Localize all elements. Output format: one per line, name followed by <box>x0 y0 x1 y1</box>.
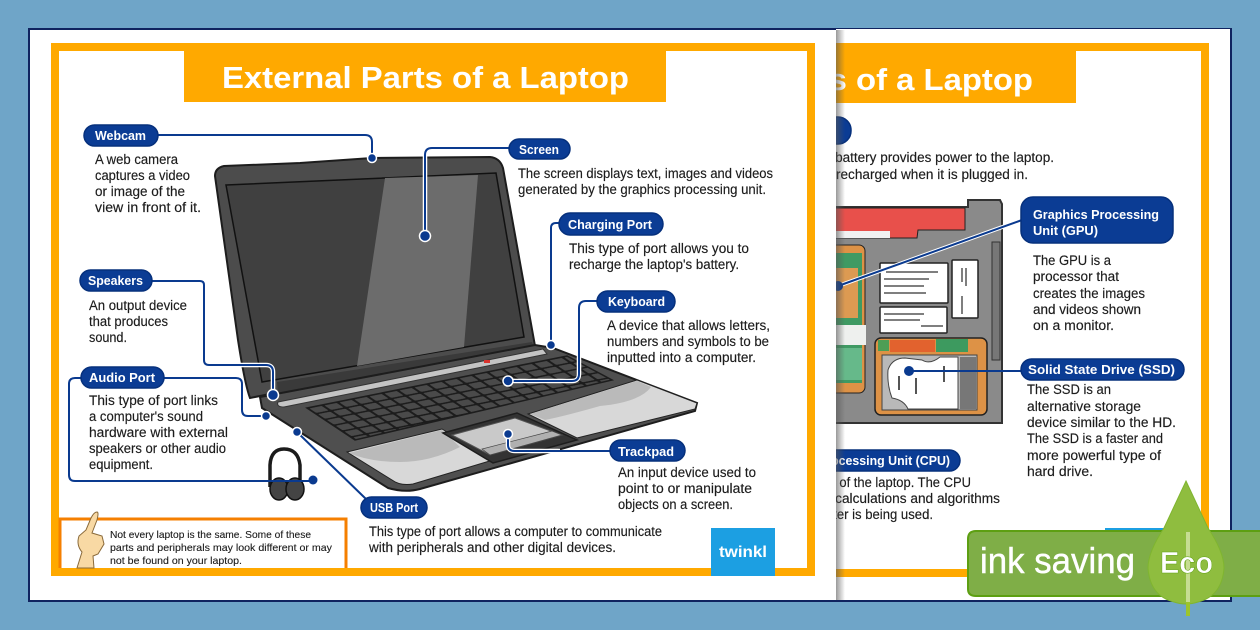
audio port label: Audio Port <box>89 370 156 385</box>
USB port text: This type of port allows a computer to communicate <box>369 524 662 539</box>
audio port text: equipment. <box>89 457 153 472</box>
trackpad <box>443 413 577 463</box>
ink saving text: ink saving <box>980 540 1135 581</box>
connector: audio port <box>162 378 270 420</box>
SSD text: more powerful type of <box>1027 448 1161 463</box>
trackpad label <box>610 440 685 461</box>
keyboard <box>307 356 612 440</box>
panel: back poster, internal parts of a laptop <box>836 28 1232 602</box>
trackpad text: point to or manipulate <box>618 481 752 496</box>
CPU label <box>760 450 960 471</box>
USB port label: USB Port <box>370 500 419 515</box>
charging port text: recharge the laptop's battery. <box>569 257 739 272</box>
SSD text: The SSD is a faster and <box>1027 431 1163 446</box>
keyboard text <box>607 318 770 365</box>
logo: twinkl <box>711 528 775 576</box>
callout: note: not be found on your laptop. <box>110 555 242 567</box>
back title: External Parts of a Laptop <box>626 62 1033 97</box>
Eco text: Eco <box>1160 545 1213 580</box>
laptop lid <box>215 157 535 398</box>
screen label: Screen <box>519 142 559 157</box>
callout: note: parts and peripherals may look different or may <box>110 542 333 554</box>
SSD text: device similar to the HD. <box>1027 415 1176 430</box>
CPU label: Central Processing Unit (CPU) <box>772 453 950 468</box>
trackpad text: objects on a screen. <box>618 497 733 512</box>
connector: keyboard <box>503 301 598 386</box>
CPU text: The brain of the laptop. The CPU <box>781 475 971 490</box>
palm rest <box>347 380 697 484</box>
screen text <box>518 166 773 197</box>
connector: charging port <box>546 223 560 350</box>
battery label and text: It is recharged when it is plugged in. <box>811 167 1028 182</box>
back title <box>590 50 1076 103</box>
audio port text <box>89 393 228 472</box>
webcam text: A web camera <box>95 152 178 167</box>
SSD label <box>1021 359 1184 380</box>
webcam text <box>95 152 201 215</box>
keyboard text: inputted into a computer. <box>607 350 756 365</box>
icon: pointing hand <box>77 512 104 568</box>
keyboard label <box>597 291 675 312</box>
badge: ink saving Eco <box>968 481 1260 616</box>
keyboard text: numbers and symbols to be <box>607 334 769 349</box>
connector: trackpad <box>504 430 611 451</box>
charging port label: Charging Port <box>568 217 653 232</box>
battery label and text: The battery provides power to the laptop. <box>808 150 1054 165</box>
panel: front poster, external parts of a laptop <box>28 28 836 602</box>
speakers text <box>89 298 187 345</box>
trackpad text: An input device used to <box>618 465 756 480</box>
CPU text: when the computer is being used. <box>736 507 933 522</box>
speakers text: sound. <box>89 330 127 345</box>
audio port text: hardware with external <box>89 425 228 440</box>
icon: headphones <box>270 449 304 500</box>
battery label and text <box>780 117 1054 182</box>
audio port text: a computer's sound <box>89 409 203 424</box>
laptop underside illustration <box>836 199 1003 424</box>
webcam text: view in front of it. <box>95 200 201 215</box>
speakers text: that produces <box>89 314 168 329</box>
webcam text: captures a video <box>95 168 190 183</box>
logo: twinkl: twinkl <box>719 544 767 561</box>
banner <box>968 531 1260 596</box>
trackpad text <box>618 465 756 512</box>
USB port text: with peripherals and other digital devices. <box>368 540 616 555</box>
title <box>184 50 666 102</box>
CPU text: It performs calculations and algorithms <box>766 491 1000 506</box>
webcam text: or image of the <box>95 184 185 199</box>
speakers label <box>80 270 152 291</box>
screen text: The screen displays text, images and videos <box>518 166 773 181</box>
speakers label: Speakers <box>88 273 143 288</box>
GPU label: Graphics Processing <box>1033 207 1159 222</box>
connector: screen <box>420 148 509 242</box>
audio port text: This type of port links <box>89 393 218 408</box>
SSD text <box>1027 382 1176 479</box>
speakers text: An output device <box>89 298 187 313</box>
USB port label <box>361 497 427 518</box>
GPU text: and videos shown <box>1033 302 1141 317</box>
screen text: generated by the graphics processing unit. <box>518 182 766 197</box>
audio port label <box>81 367 164 388</box>
GPU text: processor that <box>1033 269 1119 284</box>
GPU label: Unit (GPU) <box>1033 223 1098 238</box>
icon: leaf drop <box>1148 481 1224 616</box>
GPU text: creates the images <box>1033 286 1145 301</box>
callout: note: Not every laptop is the same. Some of these <box>110 529 311 541</box>
callout: note <box>60 519 346 568</box>
SSD text: The SSD is an <box>1027 382 1111 397</box>
GPU text: on a monitor. <box>1033 318 1114 333</box>
keyboard text: A device that allows letters, <box>607 318 770 333</box>
connector: speakers <box>150 281 278 400</box>
SSD text: alternative storage <box>1027 399 1141 414</box>
charging port text: This type of port allows you to <box>569 241 749 256</box>
front poster drop shadow <box>836 30 845 600</box>
screen label <box>509 139 570 159</box>
trackpad label: Trackpad <box>618 444 674 459</box>
laptop illustration <box>215 157 697 491</box>
connector: GPU <box>833 220 1022 291</box>
GPU text: The GPU is a <box>1033 253 1111 268</box>
USB port text <box>368 524 662 555</box>
charging port label <box>559 213 663 235</box>
connector: webcam <box>156 135 376 162</box>
CPU text <box>736 475 1000 522</box>
audio port text: speakers or other audio <box>89 441 226 456</box>
connector: USB port <box>292 428 366 499</box>
connector: SSD <box>904 366 1022 376</box>
title: External Parts of a Laptop <box>222 60 629 95</box>
keyboard label: Keyboard <box>608 294 665 309</box>
laptop base <box>260 345 697 491</box>
SSD text: hard drive. <box>1027 464 1093 479</box>
webcam label: Webcam <box>95 128 146 143</box>
webcam label <box>84 125 158 146</box>
SSD label: Solid State Drive (SSD) <box>1028 362 1175 377</box>
GPU text <box>1033 253 1145 333</box>
charging port text <box>569 241 749 272</box>
connector: headphones <box>69 378 318 484</box>
GPU label <box>1021 197 1173 243</box>
